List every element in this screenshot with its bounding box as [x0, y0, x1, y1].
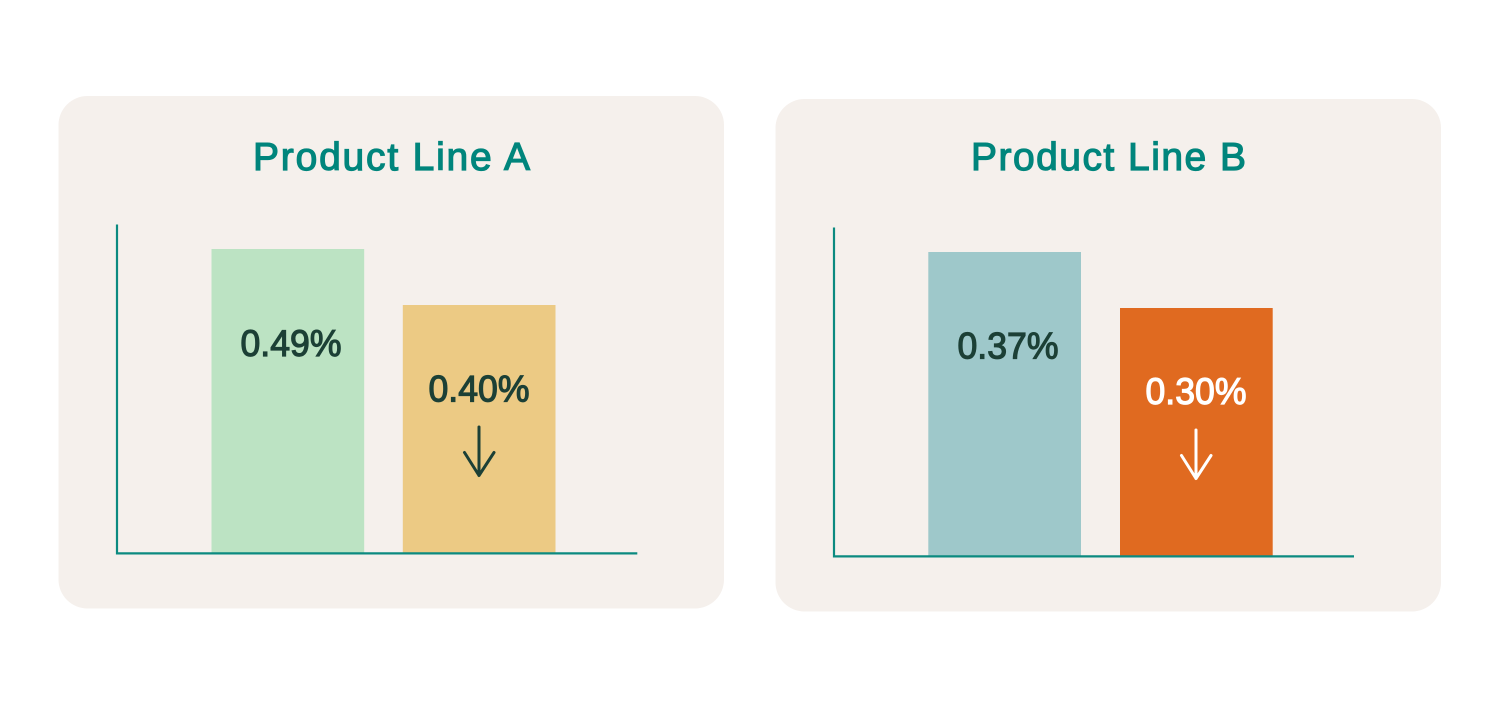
- chart axes A: [117, 224, 637, 553]
- bar: 0.49%: 0.49%: [240, 323, 342, 364]
- bar: 0.40%: 0.40%: [428, 368, 530, 410]
- icon: down arrow A: [464, 427, 494, 476]
- heading: Product Line B: Product Line B: [971, 136, 1246, 179]
- bar: 0.30%: [1120, 308, 1273, 556]
- bar: 0.30%: 0.30%: [1146, 371, 1246, 412]
- heading: Product Line A: Product Line A: [253, 136, 530, 179]
- icon: down arrow B: [1182, 430, 1211, 478]
- chart axes B: [834, 228, 1354, 556]
- panel: Product Line A: [58, 96, 724, 608]
- bar: 0.37%: 0.37%: [958, 326, 1058, 366]
- panel: Product Line B: [776, 99, 1441, 612]
- bar: 0.49%: [212, 249, 364, 553]
- bar: 0.40%: [403, 305, 556, 553]
- bar: 0.37%: [928, 252, 1081, 556]
